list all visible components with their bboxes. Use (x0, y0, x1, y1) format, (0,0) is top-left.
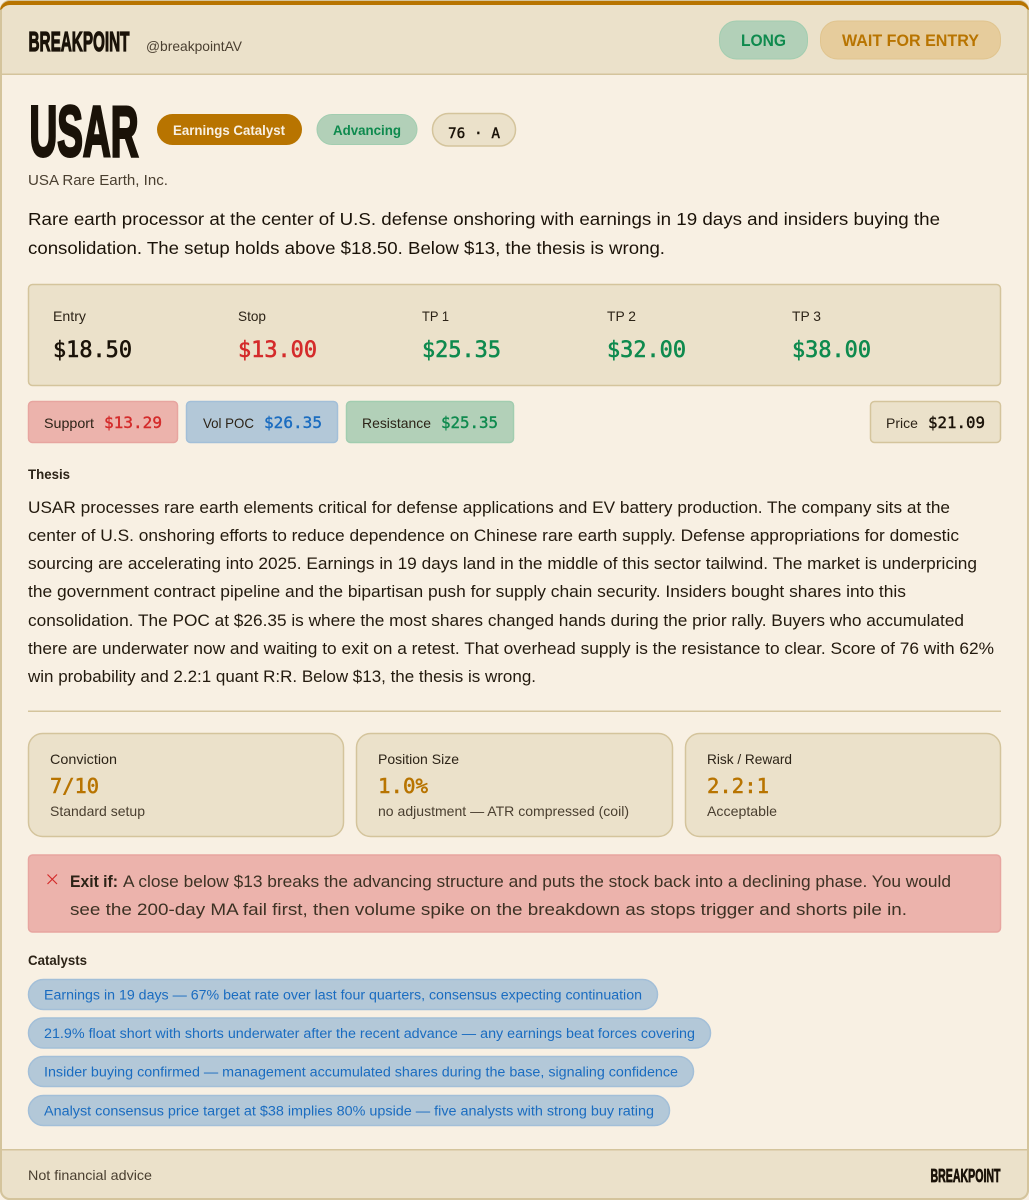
tp2: $32.00 (607, 338, 686, 363)
thesis text: consolidation. The POC at $26.35 is where the most shares changed hands during the prior rally. Buyers who accumulated (28, 611, 964, 630)
handle: @breakpointAV (146, 38, 243, 54)
chip: vol poc: $26.35 (264, 413, 322, 432)
tp1: TP 1 (422, 308, 449, 324)
tag: earnings catalyst: Earnings Catalyst (173, 122, 285, 138)
chip: resistance: Resistance (362, 415, 431, 431)
stop: $13.00 (238, 338, 317, 363)
callout: exit condition (28, 855, 1000, 932)
thesis heading: Thesis (28, 466, 70, 482)
stop (238, 308, 317, 363)
entry: $18.50 (53, 338, 132, 363)
thesis text: the government contract pipeline and the bipartisan push for supply chain security. Insiders bought shares into this (28, 582, 906, 601)
summary text: consolidation. The setup holds above $18.50. Below $13, the thesis is wrong. (28, 238, 665, 258)
tp3: $38.00 (792, 338, 871, 363)
exit text: A close below $13 breaks the advancing structure and puts the stock back into a declining phase. You would (123, 872, 951, 891)
chip: price (870, 402, 1000, 442)
catalyst pill 3: Insider buying confirmed — management accumulated shares during the base, signaling confidence (44, 1064, 678, 1080)
thesis text: there are underwater now and waiting to exit on a retest. That overhead supply is the resistance to clear. Score of 76 with 62% (28, 639, 994, 658)
catalyst pill 3 (28, 1056, 694, 1086)
card: risk reward: Acceptable (707, 803, 777, 819)
catalyst pill 2: 21.9% float short with shorts underwater after the recent advance — any earnings beat forces covering (44, 1026, 695, 1042)
tp1: $25.35 (422, 338, 501, 363)
catalyst pill 1 (28, 980, 658, 1010)
disclaimer: Not financial advice (28, 1167, 152, 1183)
badge: long (720, 21, 808, 59)
tp2: TP 2 (607, 308, 636, 324)
badge: wait for entry (820, 21, 1000, 59)
footer (0, 1149, 1029, 1199)
panel: trade levels (28, 284, 1000, 386)
catalyst pill 4: Analyst consensus price target at $38 implies 80% upside — five analysts with strong buy rating (44, 1104, 654, 1120)
tp2 (607, 308, 686, 363)
tp3 (792, 308, 871, 363)
chip: vol poc (186, 402, 338, 442)
card: risk reward: 2.2:1 (707, 774, 769, 798)
company name: USA Rare Earth, Inc. (28, 172, 168, 189)
chip: price: $21.09 (928, 413, 985, 432)
card: conviction: Standard setup (50, 803, 145, 819)
exit text (70, 872, 951, 919)
thesis text: USAR processes rare earth elements critical for defense applications and EV battery production. The company sits at the (28, 498, 950, 517)
card: position size: 1.0% (378, 774, 429, 798)
logo: BREAKPOINT (28, 26, 130, 57)
header bar (0, 1, 1029, 75)
thesis text: center of U.S. onshoring efforts to reduce dependence on Chinese rare earth supply. Defense appropriations for domestic (28, 526, 959, 545)
entry: Entry (53, 308, 86, 324)
summary text (28, 209, 940, 258)
chip: support: Support (44, 415, 94, 431)
card: conviction (28, 734, 344, 836)
card: conviction: Conviction (50, 751, 117, 767)
tag: advancing: Advancing (333, 122, 401, 138)
tag: score (432, 114, 516, 146)
chip: resistance (346, 402, 514, 442)
card: risk reward: Risk / Reward (707, 751, 792, 767)
tp3: TP 3 (792, 308, 821, 324)
exit text: see the 200-day MA fail first, then volume spike on the breakdown as stops trigger and shorts pile in. (70, 900, 907, 919)
card: conviction: 7/10 (50, 774, 99, 798)
tag: earnings catalyst (157, 114, 302, 145)
entry (53, 308, 132, 363)
chip: vol poc: Vol POC (203, 415, 254, 431)
chip: support (28, 402, 178, 442)
card: position size: no adjustment — ATR compressed (coil) (378, 803, 629, 819)
thesis text: win probability and 2.2:1 quant R:R. Below $13, the thesis is wrong. (27, 667, 536, 686)
catalyst pill 1: Earnings in 19 days — 67% beat rate over last four quarters, consensus expecting continuation (44, 988, 642, 1004)
thesis text (27, 498, 994, 686)
thesis text: sourcing are accelerating into 2025. Earnings in 19 days land in the middle of this sector tailwind. The market is underpricing (28, 554, 977, 573)
card: position size (356, 734, 672, 836)
exit text: Exit if: (70, 872, 118, 891)
badge: wait for entry: WAIT FOR ENTRY (842, 32, 979, 50)
catalyst pill 4 (28, 1096, 670, 1126)
catalysts heading: Catalysts (28, 952, 87, 968)
tag: advancing (317, 114, 417, 144)
ticker heading: USAR (30, 93, 138, 172)
catalyst pill 2 (28, 1018, 710, 1048)
card: risk reward (686, 734, 1000, 836)
summary text: Rare earth processor at the center of U.S. defense onshoring with earnings in 19 days and insiders buying the (28, 209, 940, 229)
badge: long: LONG (741, 32, 786, 50)
chip: resistance: $25.35 (441, 413, 498, 432)
icon: x mark (48, 874, 57, 884)
card: position size: Position Size (378, 751, 459, 767)
tag: score: 76 · A (448, 126, 501, 142)
chip: price: Price (886, 415, 918, 431)
tp1 (422, 308, 501, 363)
stop: Stop (238, 308, 266, 324)
chip: support: $13.29 (104, 413, 162, 432)
